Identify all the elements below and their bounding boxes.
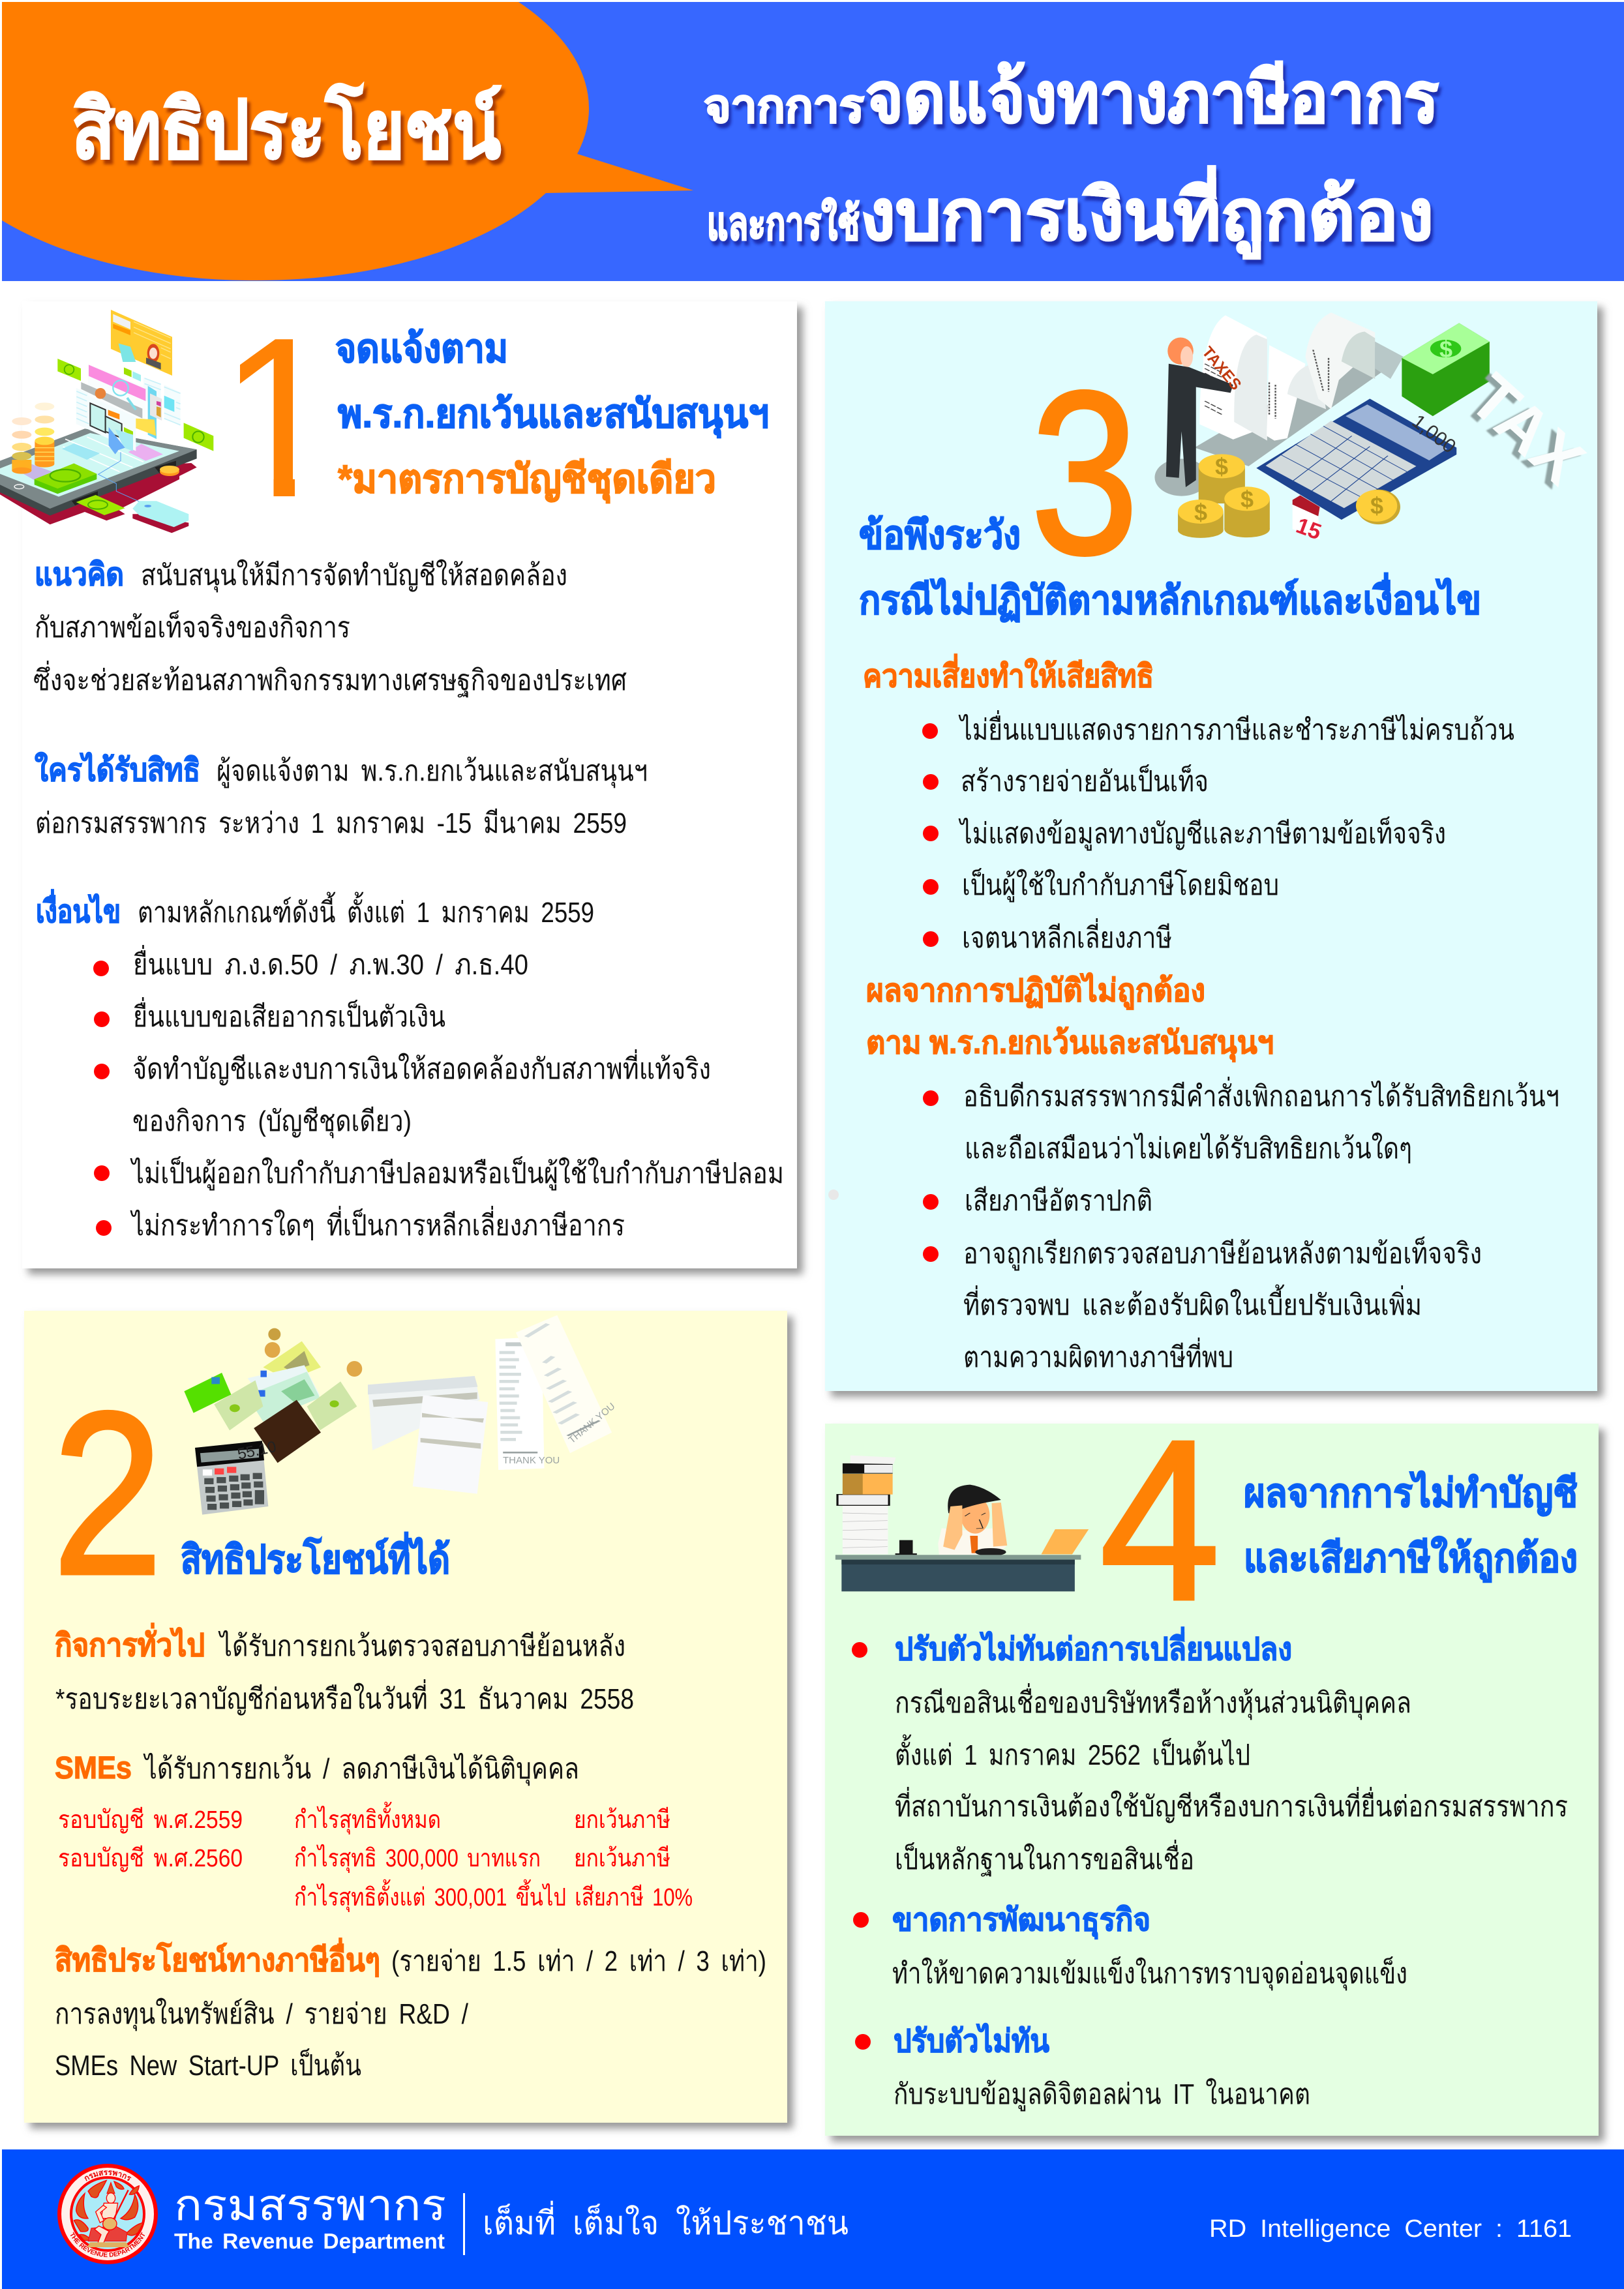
- SMEs tax table: รอบบัญชี พ.ศ.2559: [58, 1806, 243, 1834]
- item: cannot keep up with change: ตั้งแต่ 1 มกราคม 2562 เป็นต้นไป: [895, 1734, 1250, 1771]
- icon: Revenue Department emblem: THE REVENUE DEPARTMENT: [70, 2232, 145, 2258]
- illustration: wallet, calculator, receipts: THANK YOU: [503, 1455, 560, 1466]
- item: cannot adapt: ปรับตัวไม่ทัน: [894, 2022, 1049, 2059]
- general business benefit: *รอบระยะเวลาบัญชีก่อนหรือในวันที่ 31 ธันวาคม 2558: [55, 1679, 634, 1715]
- number 3: 3: [1030, 344, 1139, 603]
- contact center: RD Intelligence Center : 1161: [1209, 2215, 1572, 2243]
- consequences list: อาจถูกเรียกตรวจสอบภาษีย้อนหลังตามข้อเท็จจริง: [963, 1236, 1482, 1271]
- header banner: [2, 2, 1624, 281]
- risks list: เจตนาหลีกเลี่ยงภาษี: [962, 918, 1172, 954]
- illustration: man with tax papers, calculator, coins: $: [1370, 492, 1383, 519]
- general business benefit: ได้รับการยกเว้นตรวจสอบภาษีย้อนหลัง: [218, 1630, 625, 1662]
- slogan: เต็มที่ เต็มใจ ให้ประชาชน: [483, 2201, 849, 2241]
- panel 4 heading: ผลจากการไม่ทำบัญชี: [1244, 1470, 1578, 1516]
- illustration: man with tax papers, calculator, coins: 15: [1293, 513, 1325, 545]
- panel 4: consequences of improper accounting: [825, 1393, 1599, 2136]
- illustration: man with tax papers, calculator, coins: [1154, 312, 1598, 545]
- conditions list: ยื่นแบบขอเสียอากรเป็นตัวเงิน: [133, 996, 445, 1033]
- SMEs benefit: SMEs: [55, 1751, 132, 1786]
- SMEs tax table: กำไรสุทธิตั้งแต่ 300,001 ขึ้นไป เสียภาษี 10%: [294, 1879, 693, 1912]
- department name: The Revenue Department: [174, 2229, 445, 2253]
- consequences list: ตามความผิดทางภาษีที่พบ: [963, 1337, 1233, 1373]
- who qualifies text: [35, 751, 648, 839]
- footer bar: [2, 2149, 1624, 2289]
- small stray dot: [828, 1189, 839, 1200]
- item: lack of business development: ทำให้ขาดความเข้มแข็งในการทราบจุดอ่อนจุดแข็ง: [892, 1956, 1407, 1991]
- item: cannot keep up with change: กรณีขอสินเชื่อของบริษัทหรือห้างหุ้นส่วนนิติบุคคล: [895, 1683, 1411, 1720]
- other tax benefits: (รายจ่าย 1.5 เท่า / 2 เท่า / 3 เท่า): [391, 1945, 766, 1977]
- conditions list: เงื่อนไข: [36, 889, 121, 929]
- concept text: สนับสนุนให้มีการจัดทำบัญชีให้สอดคล้อง: [141, 559, 567, 593]
- subtitle: และการใช้: [707, 197, 860, 249]
- who qualifies text: ใครได้รับสิทธิ: [35, 751, 200, 788]
- conditions list: จัดทำบัญชีและงบการเงินให้สอดคล้องกับสภาพที่แท้จริง: [132, 1049, 711, 1085]
- panel 3 heading: [859, 513, 1481, 622]
- illustration: wallet, calculator, receipts: THANK YOU: [567, 1401, 617, 1446]
- item: lack of business development: [853, 1903, 1407, 1991]
- SMEs tax table: กำไรสุทธิทั้งหมด: [294, 1801, 441, 1834]
- consequences list: ตาม พ.ร.ก.ยกเว้นและสนับสนุนฯ: [866, 1026, 1274, 1062]
- panel 3 heading: ข้อพึงระวัง: [859, 513, 1021, 557]
- SMEs tax table: ยกเว้นภาษี: [574, 1806, 670, 1834]
- SMEs tax table: [58, 1801, 693, 1912]
- illustration: man with tax papers, calculator, coins: TAX: [1456, 360, 1598, 498]
- panel 3: cautions: [825, 301, 1598, 1391]
- panel 2: benefits: [24, 1311, 787, 2123]
- illustration: wallet, calculator, receipts: 55.10: [236, 1438, 278, 1463]
- panel 4 heading: [1244, 1470, 1578, 1583]
- panel 3 heading: กรณีไม่ปฏิบัติตามหลักเกณฑ์และเงื่อนไข: [859, 573, 1481, 622]
- item: cannot keep up with change: เป็นหลักฐานในการขอสินเชื่อ: [895, 1839, 1194, 1876]
- panel 1 heading: *มาตรการบัญชีชุดเดียว: [338, 457, 716, 503]
- speech bubble: [2, 2, 693, 280]
- department name: [174, 2181, 446, 2253]
- other tax benefits: สิทธิประโยชน์ทางภาษีอื่นๆ: [55, 1937, 380, 1978]
- who qualifies text: ผู้จดแจ้งตาม พ.ร.ก.ยกเว้นและสนับสนุนฯ: [217, 755, 648, 788]
- SMEs benefit: [55, 1751, 579, 1786]
- illustration: man with tax papers, calculator, coins: TAXES: [1198, 344, 1244, 394]
- conditions list: ยื่นแบบ ภ.ง.ด.50 / ภ.พ.30 / ภ.ธ.40: [133, 944, 528, 981]
- panel 1: notification: [0, 290, 797, 1268]
- department name: กรมสรรพากร: [174, 2181, 446, 2229]
- SMEs tax table: ยกเว้นภาษี: [574, 1845, 670, 1872]
- SMEs tax table: กำไรสุทธิ 300,000 บาทแรก: [294, 1844, 541, 1873]
- panel 4 heading: และเสียภาษีให้ถูกต้อง: [1244, 1536, 1578, 1583]
- other tax benefits: การลงทุนในทรัพย์สิน / รายจ่าย R&D /: [55, 1997, 469, 2031]
- panel 1 heading: [335, 327, 769, 503]
- item: cannot adapt: [855, 2022, 1310, 2112]
- subtitle: งบการเงินที่ถูกต้อง: [860, 166, 1434, 259]
- risks list: เป็นผู้ใช้ใบกำกับภาษีโดยมิชอบ: [962, 868, 1279, 903]
- risks list: สร้างรายจ่ายอันเป็นเท็จ: [961, 764, 1209, 798]
- conditions list: ไม่กระทำการใดๆ ที่เป็นการหลีกเลี่ยงภาษีอากร: [130, 1205, 625, 1242]
- other tax benefits: [55, 1937, 766, 2082]
- illustration: stressed man at desk: [835, 1456, 1089, 1591]
- consequences list: ที่ตรวจพบ และต้องรับผิดในเบี้ยปรับเงินเพิ่ม: [963, 1284, 1422, 1321]
- subtitle: [704, 58, 1439, 259]
- risks list: ไม่ยื่นแบบแสดงรายการภาษีและชำระภาษีไม่ครบถ้วน: [958, 710, 1514, 746]
- consequences list: [866, 972, 1559, 1373]
- illustration: wallet, calculator, receipts: [184, 1315, 617, 1515]
- general business benefit: [55, 1623, 634, 1715]
- item: cannot adapt: กับระบบข้อมูลดิจิตอลผ่าน IT ในอนาคต: [894, 2078, 1310, 2112]
- other tax benefits: SMEs New Start-UP เป็นต้น: [55, 2048, 361, 2082]
- panel 1 heading: พ.ร.ก.ยกเว้นและสนับสนุนฯ: [338, 392, 769, 438]
- subtitle: จากการ: [704, 81, 864, 132]
- illustration: man with tax papers, calculator, coins: $: [1215, 453, 1228, 480]
- number 1: 1: [219, 290, 340, 545]
- item: lack of business development: ขาดการพัฒนาธุรกิจ: [892, 1903, 1150, 1939]
- illustration: man with tax papers, calculator, coins: $: [1439, 336, 1452, 363]
- conditions list: ไม่เป็นผู้ออกใบกำกับภาษีปลอมหรือเป็นผู้ใช้ใบกำกับภาษีปลอม: [130, 1156, 784, 1191]
- consequences list: ผลจากการปฏิบัติไม่ถูกต้อง: [866, 972, 1205, 1010]
- panel 1 heading: จดแจ้งตาม: [335, 327, 508, 370]
- general business benefit: กิจการทั่วไป: [55, 1623, 205, 1663]
- panel 2 heading: สิทธิประโยชน์ที่ได้: [181, 1532, 450, 1581]
- number 2: 2: [52, 1364, 163, 1623]
- SMEs benefit: ได้รับการยกเว้น / ลดภาษีเงินได้นิติบุคคล: [143, 1752, 579, 1786]
- SMEs tax table: รอบบัญชี พ.ศ.2560: [58, 1845, 243, 1872]
- subtitle: จดแจ้งทางภาษีอากร: [865, 58, 1439, 137]
- illustration: man with tax papers, calculator, coins: $: [1241, 486, 1254, 513]
- illustration: man with tax papers, calculator, coins: 1,000: [1408, 411, 1460, 458]
- item: cannot keep up with change: [852, 1626, 1568, 1876]
- main title: สิทธิประโยชน์: [72, 83, 501, 175]
- concept text: กับสภาพข้อเท็จจริงของกิจการ: [35, 610, 350, 644]
- conditions list: ของกิจการ (บัญชีชุดเดียว): [132, 1105, 412, 1139]
- concept text: แนวคิด: [35, 558, 124, 592]
- consequences list: เสียภาษีอัตราปกติ: [965, 1185, 1152, 1217]
- icon: Revenue Department emblem: [57, 2164, 158, 2264]
- icon: Revenue Department emblem: กรมสรรพากร: [85, 2170, 132, 2181]
- item: cannot keep up with change: ปรับตัวไม่ทันต่อการเปลี่ยนแปลง: [895, 1626, 1292, 1667]
- risks list: ไม่แสดงข้อมูลทางบัญชีและภาษีตามข้อเท็จจริง: [958, 816, 1446, 851]
- consequences list: และถือเสมือนว่าไม่เคยได้รับสิทธิยกเว้นใดๆ: [965, 1132, 1412, 1165]
- concept text: ซึ่งจะช่วยสะท้อนสภาพกิจกรรมทางเศรษฐกิจของประเทศ: [33, 660, 627, 697]
- conditions list: [36, 889, 784, 1242]
- conditions list: ตามหลักเกณฑ์ดังนี้ ตั้งแต่ 1 มกราคม 2559: [138, 891, 594, 929]
- concept text: [33, 558, 627, 697]
- risks list: [863, 653, 1514, 954]
- risks list: ความเสี่ยงทำให้เสียสิทธิ: [863, 653, 1154, 694]
- illustration: tablet with money: [0, 310, 213, 533]
- number 4: 4: [1100, 1393, 1220, 1648]
- who qualifies text: ต่อกรมสรรพากร ระหว่าง 1 มกราคม -15 มีนาคม 2559: [35, 807, 627, 839]
- illustration: man with tax papers, calculator, coins: $: [1194, 499, 1207, 526]
